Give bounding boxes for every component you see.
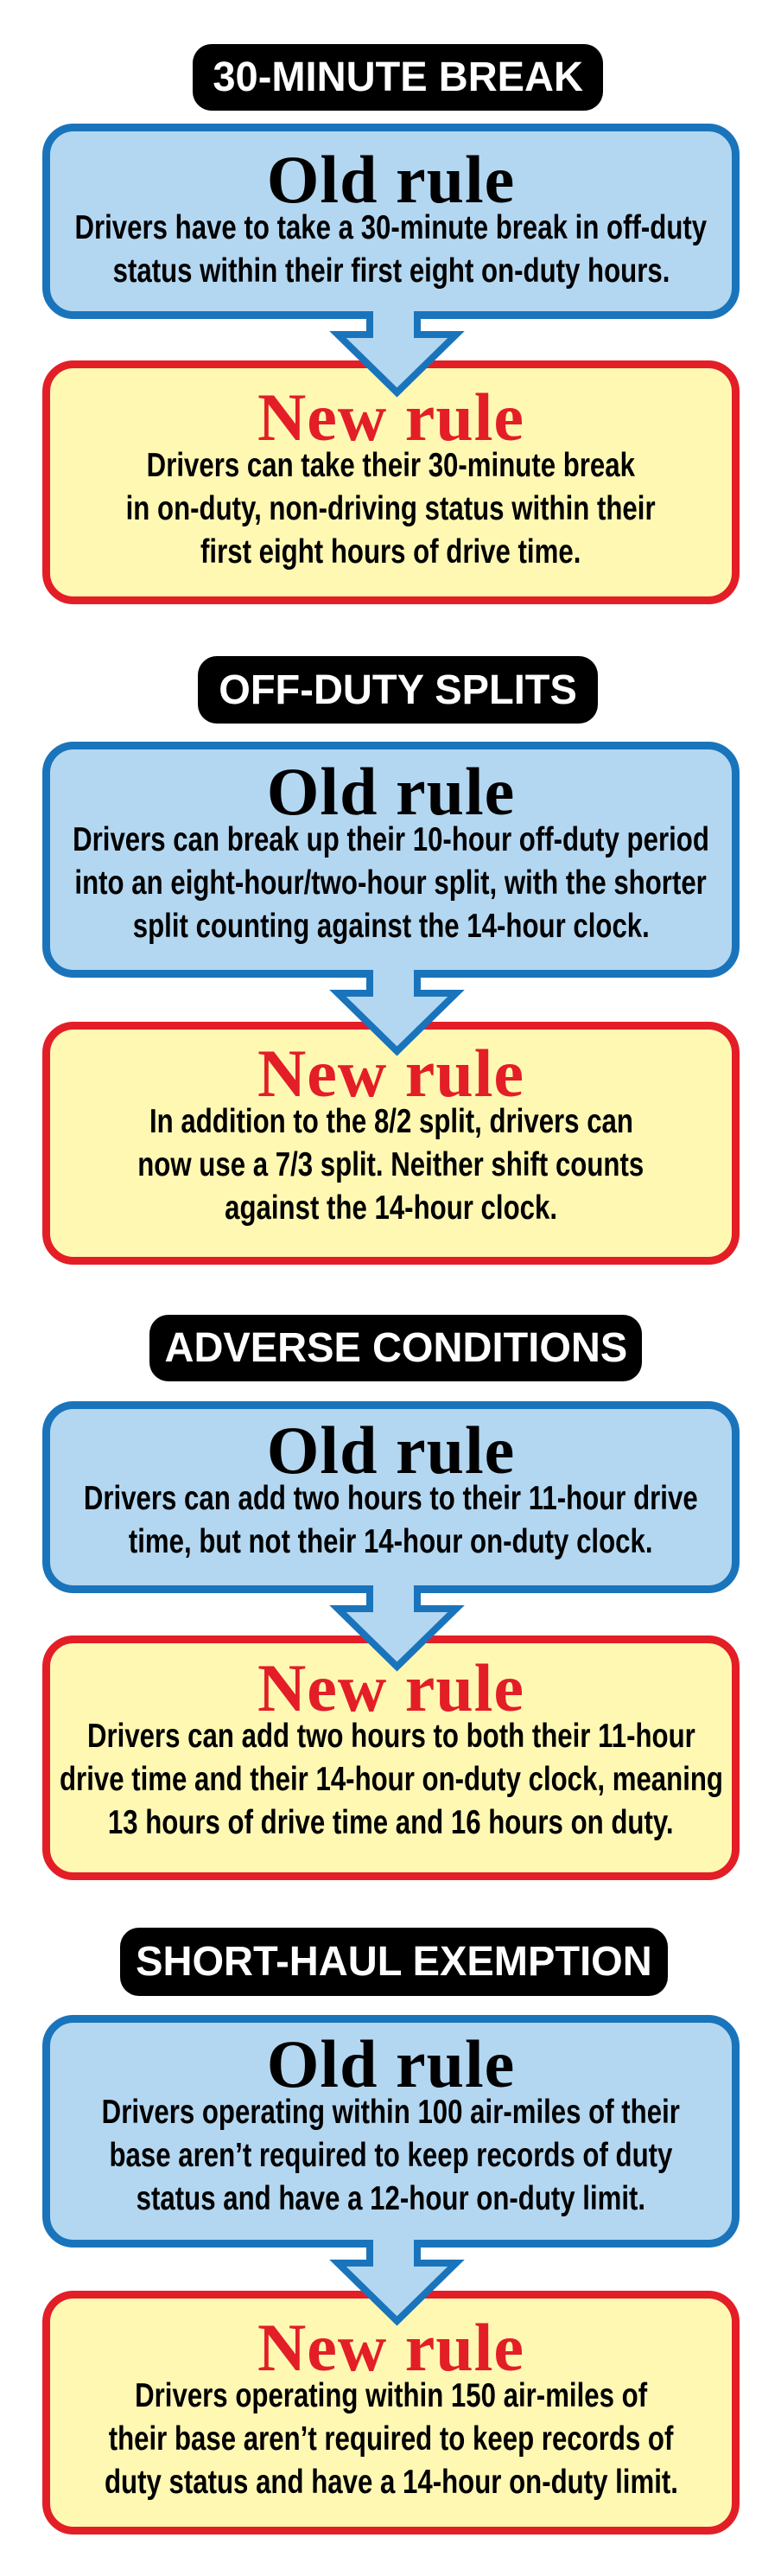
text: new rule body: Drivers can take their 30-minute break (147, 447, 635, 484)
panel: new rule 30-minute break (42, 360, 740, 604)
text: new rule body: in on-duty, non-driving status within their (126, 490, 656, 527)
text: old rule body: base aren’t required to keep records of duty (110, 2137, 672, 2174)
pill: 30-MINUTE BREAK: 30-MINUTE BREAK (213, 54, 583, 100)
text: old rule body: Drivers have to take a 30-minute break in off-duty (75, 209, 707, 246)
heading: Old rule: Old rule (267, 754, 515, 829)
heading: New rule: New rule (257, 1650, 524, 1725)
text: new rule body (59, 1718, 722, 1841)
text: new rule body: drive time and their 14-hour on-duty clock, meaning (59, 1761, 722, 1798)
text: new rule body: against the 14-hour clock. (225, 1189, 557, 1227)
text: old rule body: split counting against the 14-hour clock. (132, 908, 650, 945)
text: new rule body: their base aren’t required to keep records of (109, 2420, 673, 2458)
text: new rule body: first eight hours of drive time. (200, 533, 581, 571)
text: old rule body: into an eight-hour/two-hour split, with the shorter (75, 864, 707, 902)
arrow: old to new (329, 1585, 465, 1672)
pill: OFF-DUTY SPLITS: OFF-DUTY SPLITS (219, 667, 577, 712)
text: old rule body (73, 821, 709, 945)
text: old rule body (75, 209, 707, 290)
panel: old rule 30-minute break (42, 124, 740, 319)
text: old rule body: time, but not their 14-hour on-duty clock. (129, 1523, 653, 1560)
section: 30-minute break (42, 44, 740, 604)
heading: New rule: New rule (257, 1036, 524, 1111)
section: adverse conditions (42, 1315, 740, 1880)
heading: New rule: New rule (257, 379, 524, 455)
text: new rule body (126, 447, 656, 571)
arrow: old to new (329, 2240, 465, 2325)
text: new rule body: Drivers operating within 150 air-miles of (135, 2377, 647, 2414)
panel: old rule adverse conditions (42, 1401, 740, 1593)
pill: ADVERSE CONDITIONS: ADVERSE CONDITIONS (164, 1325, 627, 1371)
text: old rule body (84, 1480, 698, 1560)
text: old rule body: Drivers can add two hours to their 11-hour drive (84, 1480, 698, 1517)
panel: new rule adverse conditions (42, 1636, 740, 1880)
heading: Old rule: Old rule (267, 2026, 515, 2101)
text: old rule body: Drivers operating within 100 air-miles of their (102, 2094, 680, 2131)
arrow: old to new (329, 311, 465, 398)
text: old rule body: Drivers can break up their 10-hour off-duty period (73, 821, 709, 858)
text: new rule body: duty status and have a 14-hour on-duty limit. (105, 2464, 677, 2501)
heading: New rule: New rule (257, 2310, 524, 2385)
text: new rule body (138, 1103, 644, 1227)
text: old rule body: status and have a 12-hour on-duty limit. (137, 2180, 645, 2217)
arrow: old to new (329, 970, 465, 1056)
pill: 30-MINUTE BREAK (193, 44, 603, 111)
text: new rule body: Drivers can add two hours to both their 11-hour (87, 1718, 695, 1755)
text: new rule body: In addition to the 8/2 split, drivers can (149, 1103, 632, 1140)
heading: Old rule: Old rule (267, 1412, 515, 1488)
text: old rule body: status within their first eight on-duty hours. (112, 252, 670, 290)
text: new rule body: now use a 7/3 split. Neither shift counts (138, 1146, 644, 1183)
heading: Old rule: Old rule (267, 142, 515, 217)
pill: OFF-DUTY SPLITS (198, 656, 598, 724)
panel: new rule off-duty splits (42, 1022, 740, 1265)
pill: SHORT-HAUL EXEMPTION (120, 1928, 668, 1996)
panel: old rule off-duty splits (42, 742, 740, 978)
panel: old rule short-haul (42, 2015, 740, 2248)
text: new rule body: 13 hours of drive time and 16 hours on duty. (108, 1804, 674, 1841)
text: old rule body (102, 2094, 680, 2217)
text: new rule body (105, 2377, 677, 2501)
pill: SHORT-HAUL EXEMPTION: SHORT-HAUL EXEMPTION (136, 1939, 652, 1985)
panel: new rule short-haul (42, 2291, 740, 2535)
section: short-haul exemption (42, 1928, 740, 2535)
section: off-duty splits (42, 656, 740, 1265)
pill: ADVERSE CONDITIONS (149, 1315, 642, 1381)
